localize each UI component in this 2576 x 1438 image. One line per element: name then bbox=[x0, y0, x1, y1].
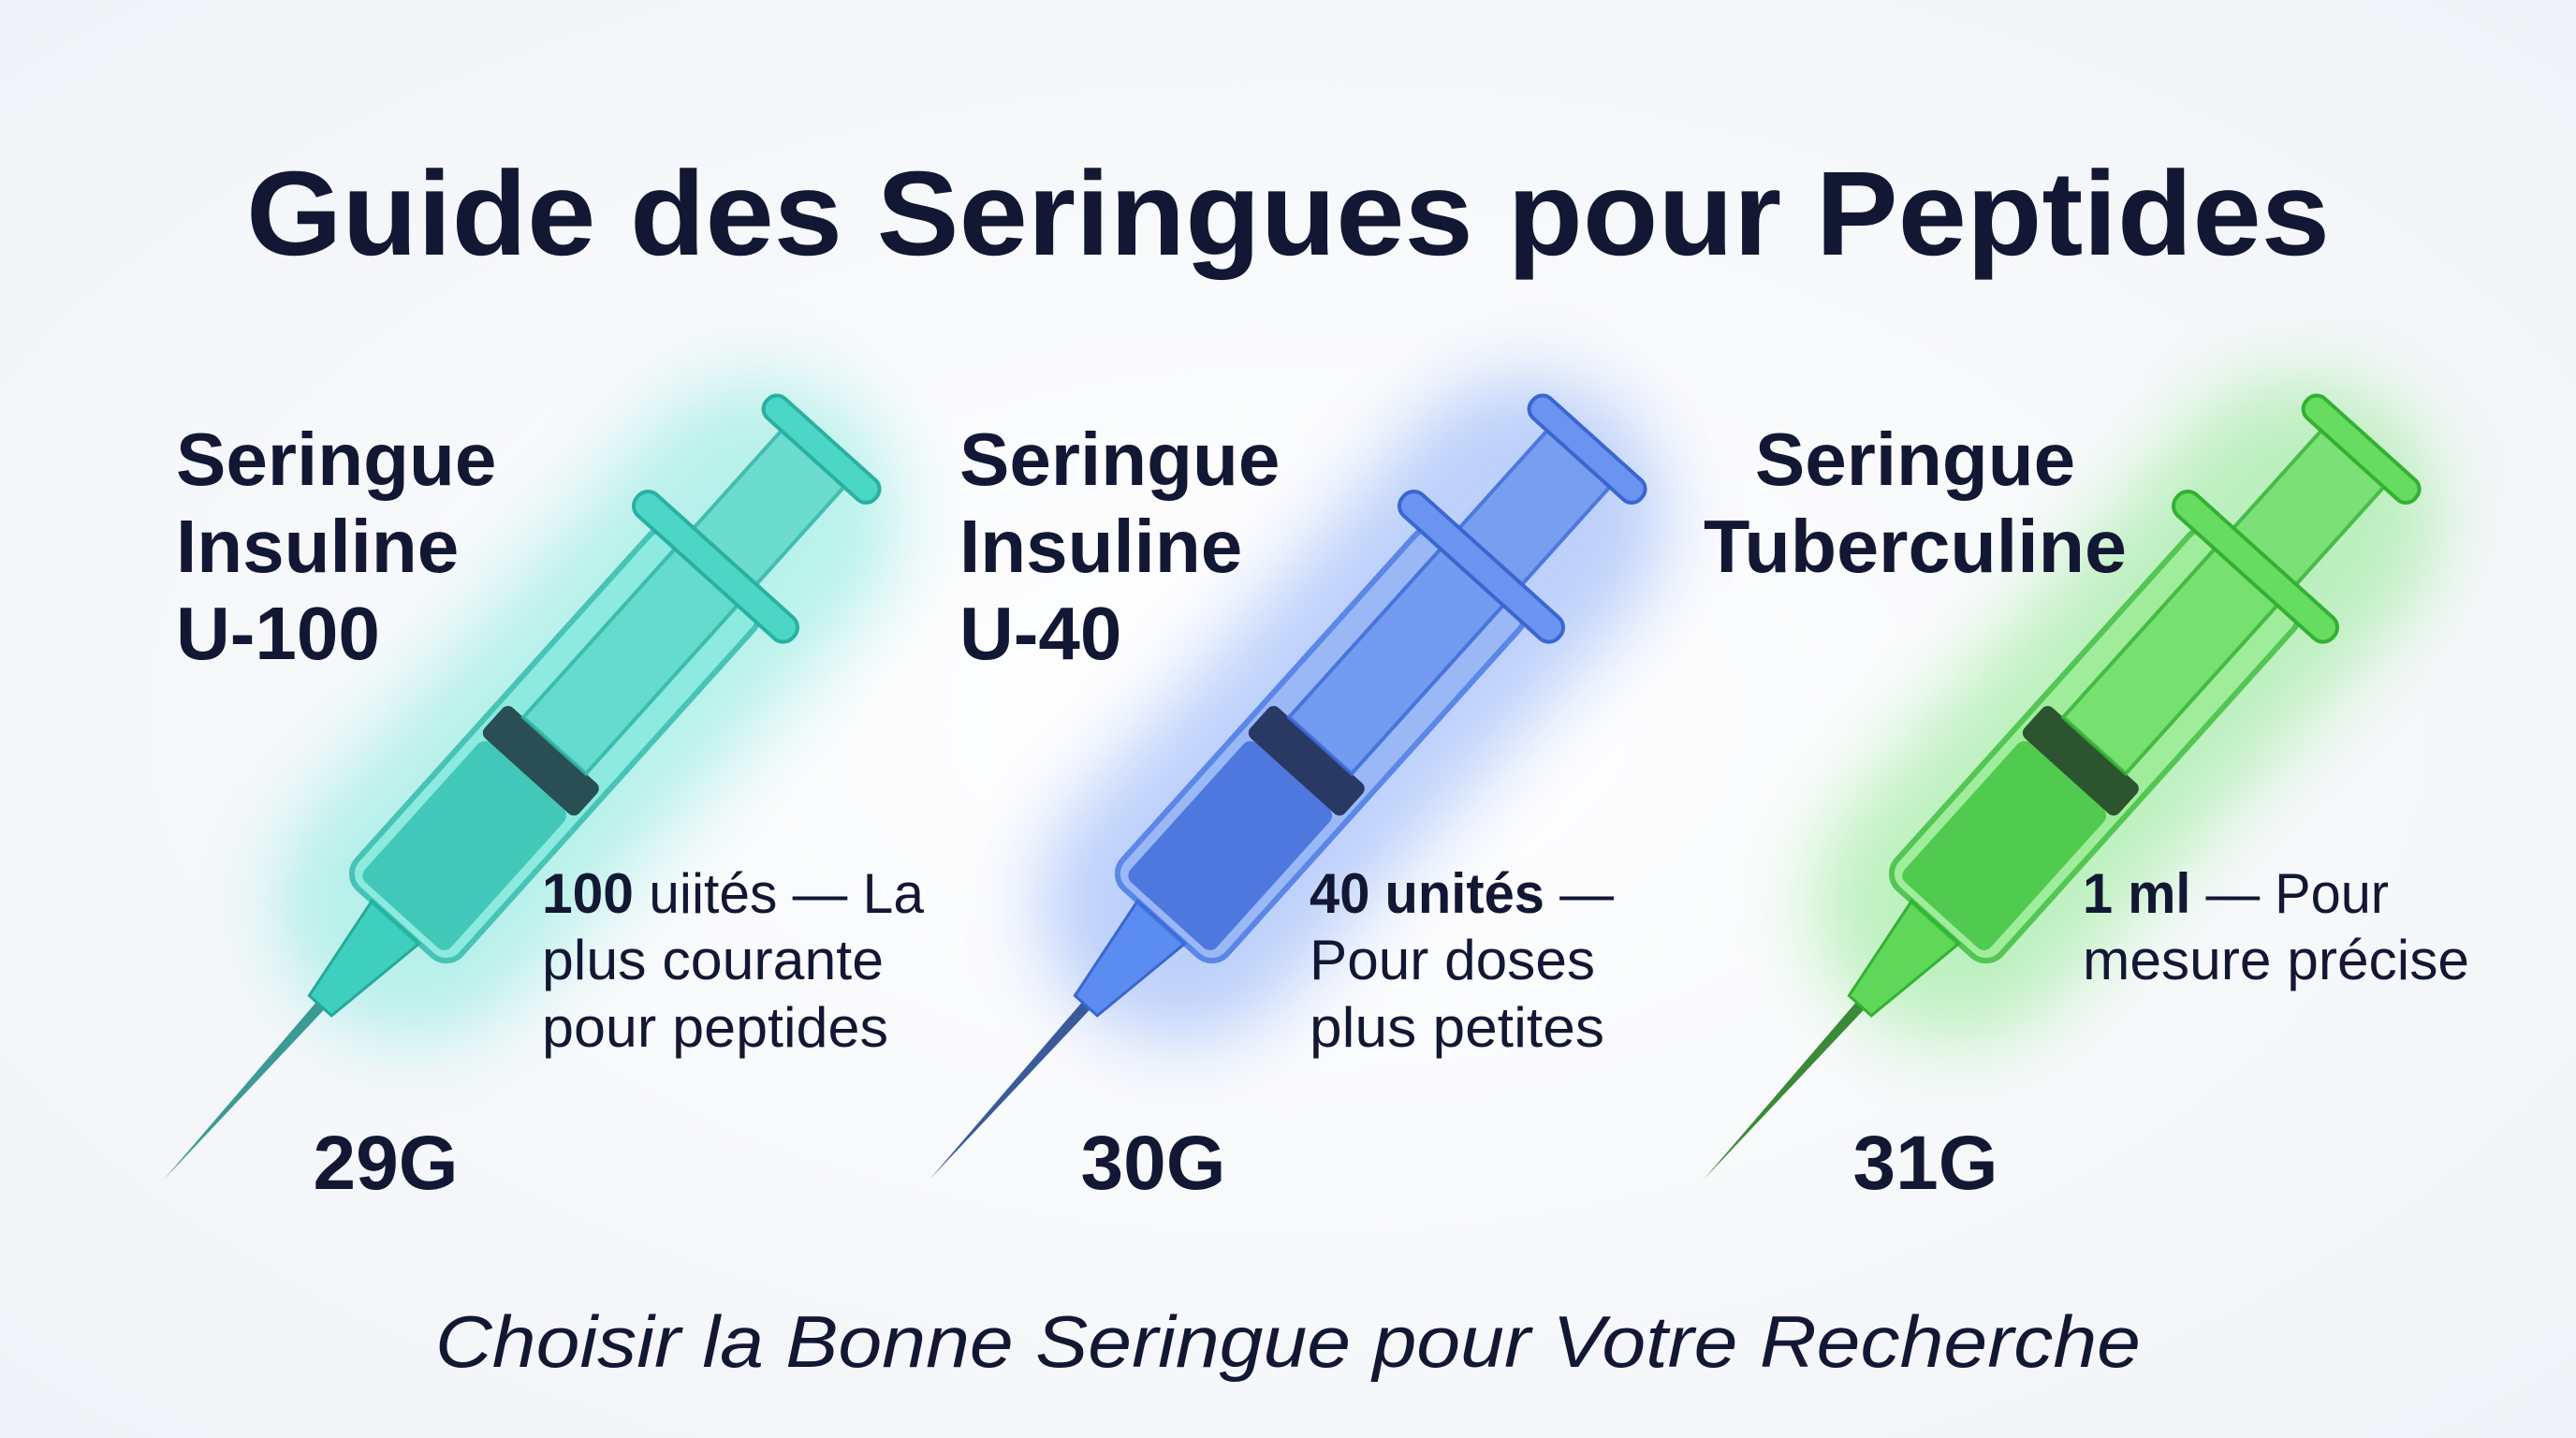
label: Tuberculine bbox=[1704, 418, 2127, 588]
description: U-100 bbox=[542, 862, 925, 1059]
syringe: U-100 teal bbox=[60, 320, 958, 1273]
syringe: tuberculine green bbox=[1600, 320, 2497, 1273]
syringe: U-40 blue bbox=[826, 320, 1723, 1273]
label: U-40: Seringue bbox=[959, 418, 1280, 501]
label: Tuberculine: Tuberculine bbox=[1704, 505, 2127, 588]
description: U-40: Pour doses bbox=[1310, 929, 1595, 991]
label: U-40: U-40 bbox=[959, 592, 1121, 675]
description: tuberculine: 1 ml — Pour bbox=[2083, 862, 2389, 925]
description: U-40: 40 unités — bbox=[1310, 862, 1614, 925]
gauge: 31G: 31G bbox=[1853, 1121, 1998, 1206]
gauge: 30G: 30G bbox=[1080, 1121, 1226, 1206]
label: U-100: Insuline bbox=[176, 505, 459, 588]
title: Guide des Seringues pour Peptides bbox=[246, 147, 2330, 281]
description: U-100: pour peptides bbox=[542, 996, 888, 1059]
label: U-100: Seringue bbox=[176, 418, 496, 501]
label: U-100: U-100 bbox=[176, 592, 380, 675]
description: tuberculine: mesure précise bbox=[2083, 929, 2469, 991]
description: U-100: plus courante bbox=[542, 929, 884, 991]
footer tagline: Choisir la Bonne Seringue pour Votre Recherche bbox=[435, 1300, 2141, 1383]
label: U-100 bbox=[176, 418, 496, 675]
description: U-40 bbox=[1310, 862, 1614, 1059]
gauge: 29G: 29G bbox=[313, 1121, 459, 1206]
label: U-40: Insuline bbox=[959, 505, 1242, 588]
description: tuberculine bbox=[2083, 862, 2469, 991]
description: U-100: 100 uiités — La bbox=[542, 862, 925, 925]
label: Tuberculine: Seringue bbox=[1755, 418, 2075, 501]
description: U-40: plus petites bbox=[1310, 996, 1604, 1059]
label: U-40 bbox=[959, 418, 1280, 675]
